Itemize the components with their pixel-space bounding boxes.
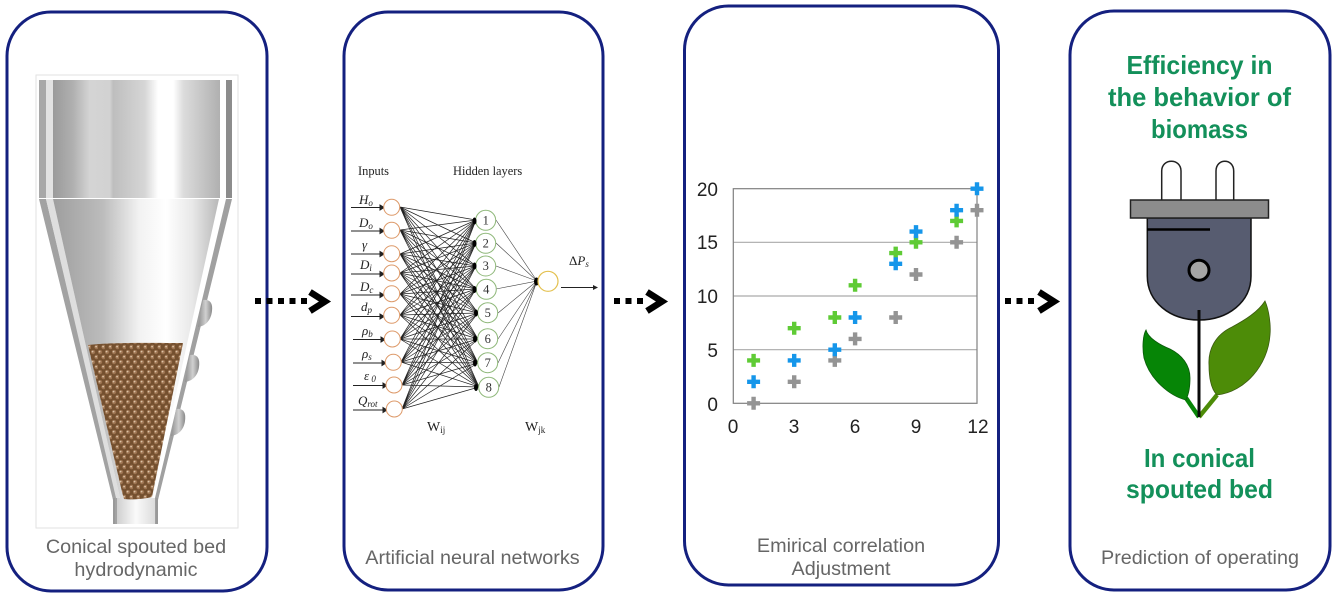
input labels: 0 [369, 374, 376, 384]
column labels: Inputs [358, 164, 389, 178]
hidden node numbers: 1 [483, 214, 489, 228]
arrow: panel 1 to panel 2 [255, 292, 325, 311]
gas inlet bumps [171, 300, 212, 436]
plug plate [1130, 200, 1268, 218]
caption [757, 535, 925, 580]
arrow: panel 3 to panel 4 [1005, 292, 1054, 311]
hidden nodes [476, 210, 499, 397]
input labels: o [368, 221, 373, 231]
hidden node numbers: 7 [485, 356, 491, 370]
panel: artificial neural networks [344, 12, 603, 590]
heading: in conical spouted bed: In conical [1144, 443, 1255, 473]
caption: Prediction of operating [1101, 547, 1299, 569]
input labels: D [360, 279, 369, 294]
input labels: γ [362, 237, 368, 252]
hidden node numbers: 5 [485, 306, 491, 320]
heading: efficiency: the behavior of [1108, 82, 1291, 112]
heading: efficiency: biomass [1151, 114, 1248, 144]
panel: prediction of operating [1070, 11, 1330, 590]
input to hidden connections [400, 207, 479, 409]
input labels: D [359, 215, 368, 230]
y axis labels: 20 [697, 180, 718, 201]
left leaf [1143, 330, 1199, 417]
input labels: o [368, 198, 373, 208]
input labels [358, 192, 378, 409]
plug socket circle [1189, 260, 1209, 280]
x axis labels: 3 [789, 417, 799, 438]
x axis labels: 0 [728, 417, 738, 438]
plug detail line [1147, 228, 1210, 231]
hidden node numbers: 4 [483, 282, 490, 296]
input labels: rot [367, 399, 378, 409]
series: gray markers [747, 204, 984, 410]
input labels: d [361, 299, 368, 314]
input labels: D [360, 257, 369, 272]
input labels: c [369, 285, 373, 295]
particle bed [88, 343, 183, 499]
input labels: b [368, 329, 373, 339]
series: green markers [747, 214, 963, 367]
caption: Conical spouted bed [46, 536, 226, 558]
hidden node numbers [483, 214, 492, 394]
scatter chart [697, 180, 989, 438]
y axis labels: 10 [697, 287, 718, 308]
node entry markers [472, 218, 539, 391]
output arrow [561, 285, 598, 290]
input labels: H [359, 192, 368, 207]
input labels: s [368, 352, 372, 362]
column labels: Hidden layers [453, 164, 522, 178]
caption [46, 536, 226, 581]
weight labels [427, 420, 546, 435]
plug body [1147, 218, 1251, 320]
hidden node numbers: 8 [486, 380, 492, 394]
output label: s [585, 259, 589, 269]
hidden node numbers: 3 [483, 259, 489, 273]
y axis labels: 15 [697, 233, 718, 254]
output label: ΔP [569, 253, 585, 268]
output node [538, 271, 558, 291]
panel: empirical correlation [684, 6, 998, 585]
caption: Emirical correlation [757, 535, 925, 557]
weight labels: ij [440, 425, 445, 435]
heading: in conical spouted bed [1126, 443, 1273, 504]
plug prongs [1162, 161, 1234, 200]
input labels: p [366, 305, 372, 315]
heading: efficiency [1108, 50, 1291, 144]
right leaf [1199, 301, 1270, 417]
weight labels: W [427, 420, 440, 435]
x axis labels: 6 [850, 417, 860, 438]
x axis labels: 12 [967, 417, 989, 438]
input labels: ρ [362, 346, 368, 361]
illustration: conical spouted bed vessel [36, 75, 238, 528]
input labels: Q [358, 393, 367, 408]
heading: in conical spouted bed: spouted bed [1126, 474, 1273, 504]
input nodes [384, 199, 402, 417]
y axis labels [697, 180, 718, 416]
hidden node numbers: 6 [485, 332, 491, 346]
x axis labels [728, 417, 989, 438]
weight labels: W [525, 420, 538, 435]
arrow: panel 2 to panel 3 [614, 292, 662, 311]
y axis labels: 0 [707, 395, 718, 416]
panel: conical spouted bed [7, 12, 267, 591]
caption: Artificial neural networks [365, 547, 580, 569]
icon: plug with leaves [1130, 161, 1270, 417]
hidden node numbers: 2 [483, 236, 489, 250]
input labels: i [369, 263, 372, 273]
hidden to output connections [496, 220, 537, 387]
input arrows [351, 205, 387, 412]
series: blue markers [747, 182, 984, 388]
caption: hydrodynamic [74, 559, 198, 581]
stem [1198, 310, 1200, 417]
weight labels: jk [537, 425, 546, 435]
column labels [358, 164, 522, 178]
y axis labels: 5 [707, 341, 718, 362]
input labels: ε [364, 368, 369, 383]
neural network diagram [351, 164, 598, 435]
x axis labels: 9 [911, 417, 921, 438]
heading: efficiency: Efficiency in [1126, 50, 1272, 80]
input labels: ρ [362, 323, 368, 338]
caption: Adjustment [792, 558, 891, 580]
